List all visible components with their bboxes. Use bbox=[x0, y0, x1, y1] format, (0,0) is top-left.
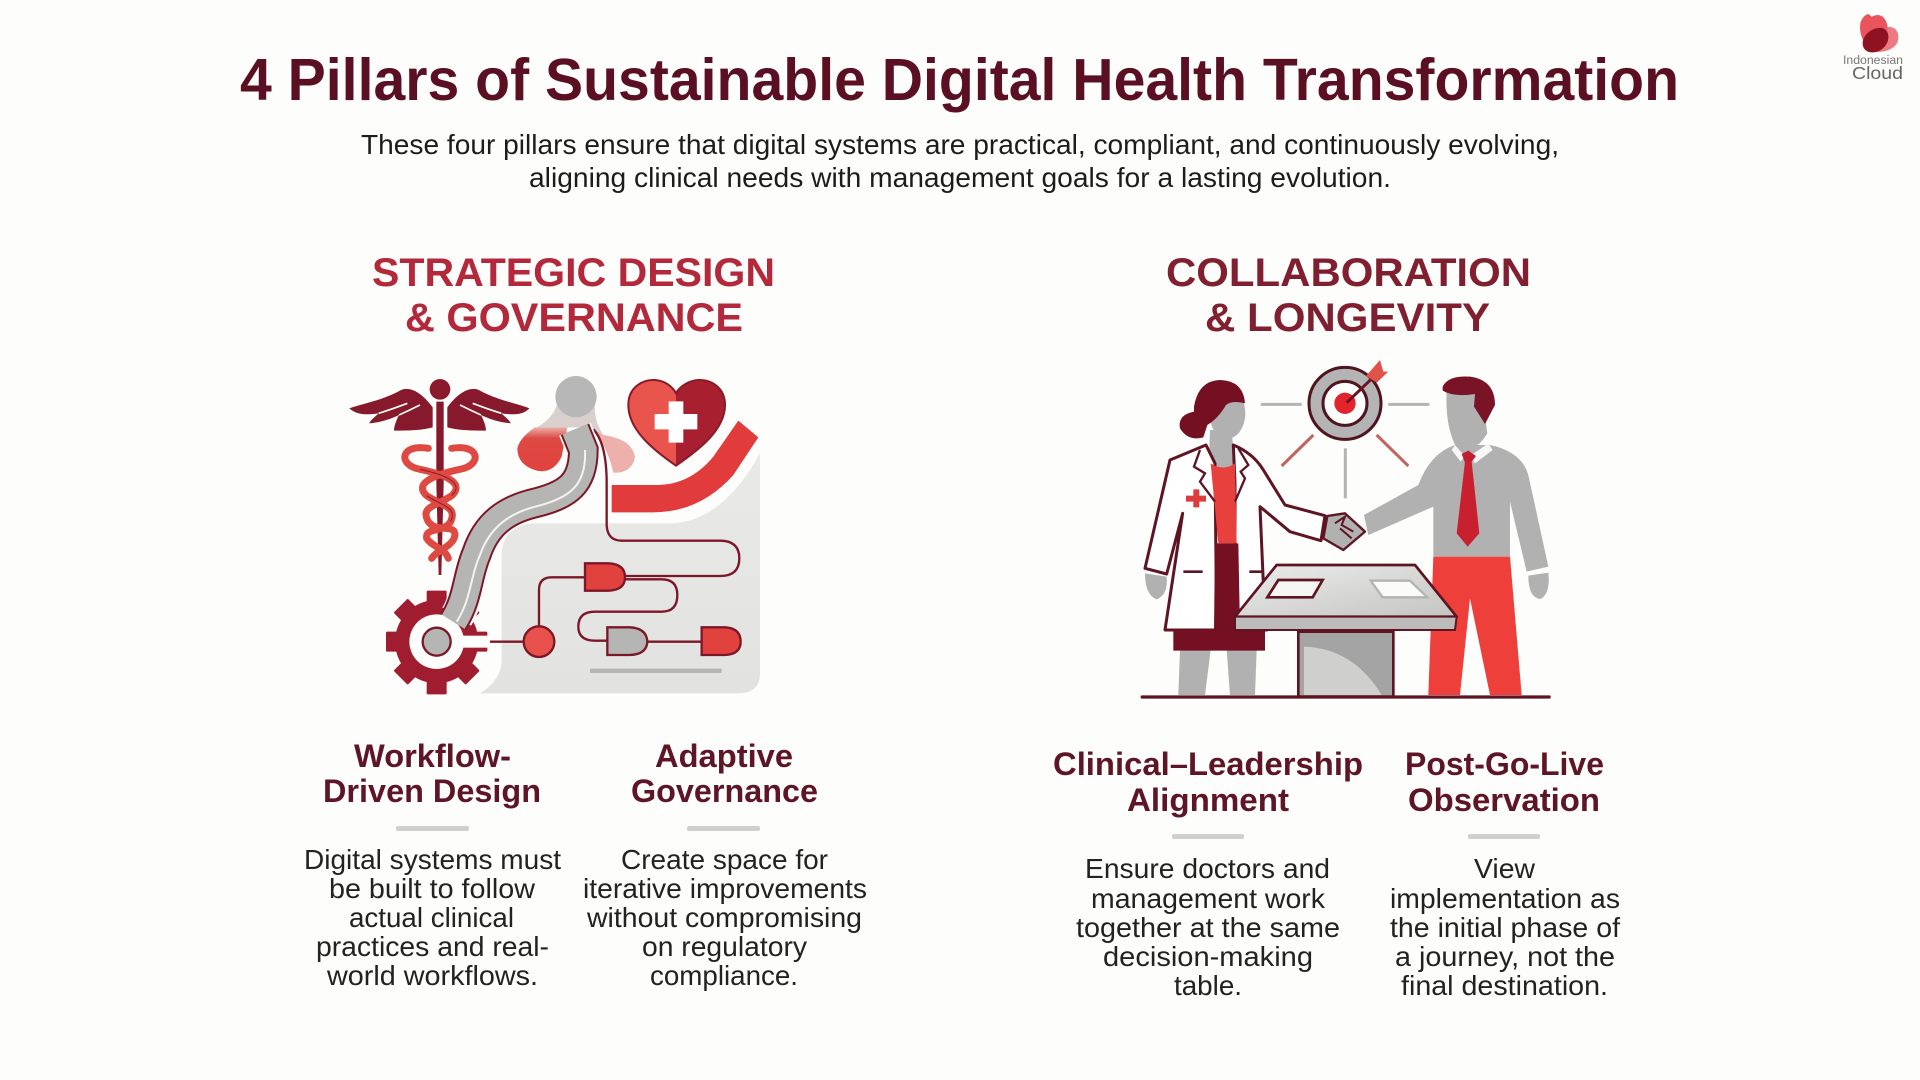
body text: Ensure doctors and bbox=[1085, 853, 1330, 884]
title: 4 Pillars of Sustainable Digital Health Transformation bbox=[240, 47, 1679, 113]
logo wordmark: Indonesian bbox=[1843, 55, 1903, 67]
body text: on regulatory bbox=[642, 931, 807, 962]
figure: doctor bbox=[1145, 380, 1325, 695]
heading: strategic design and governance: STRATEGIC DESIGN bbox=[372, 251, 775, 295]
body text bbox=[583, 844, 867, 991]
panel backdrop bbox=[480, 453, 760, 693]
body text: compliance. bbox=[650, 960, 798, 991]
heading: strategic design and governance: & GOVERNANCE bbox=[405, 296, 743, 340]
column: adaptive governance bbox=[583, 738, 867, 991]
body text: world workflows. bbox=[326, 960, 538, 991]
body text: final destination. bbox=[1401, 970, 1608, 1001]
subheading bbox=[1053, 746, 1363, 818]
body text bbox=[1076, 853, 1340, 1001]
subheading: Driven Design bbox=[323, 773, 541, 809]
illustration: doctor and manager handshake bbox=[1141, 360, 1551, 699]
subtitle: These four pillars ensure that digital systems are practical, compliant, and continuously evolving, bbox=[361, 129, 1559, 160]
subheading: Clinical–Leadership bbox=[1053, 746, 1363, 782]
icon: lamp shape bbox=[517, 376, 635, 473]
grey bar bbox=[590, 669, 722, 673]
body text: table. bbox=[1174, 970, 1242, 1001]
body text bbox=[304, 844, 561, 991]
body text bbox=[1390, 853, 1620, 1001]
icon: red swoosh bbox=[612, 421, 758, 512]
body text: without compromising bbox=[586, 902, 862, 933]
illustration: digital health workflow bbox=[349, 376, 760, 694]
subheading: Alignment bbox=[1127, 782, 1289, 818]
body text: a journey, not the bbox=[1395, 941, 1615, 972]
logo wordmark bbox=[1843, 55, 1903, 83]
body text: decision-making bbox=[1103, 941, 1313, 972]
subtitle: aligning clinical needs with management goals for a lasting evolution. bbox=[529, 162, 1391, 193]
icon: target with arrow bbox=[1309, 360, 1388, 439]
body text: practices and real- bbox=[316, 931, 549, 962]
subheading bbox=[1405, 746, 1604, 818]
icon: gear bbox=[386, 591, 490, 694]
subheading: Post-Go-Live bbox=[1405, 746, 1604, 782]
snakes bbox=[405, 448, 475, 558]
heading: strategic design and governance bbox=[372, 251, 775, 340]
body text: Create space for bbox=[621, 844, 828, 875]
figure: manager bbox=[1364, 376, 1549, 695]
subheading: Workflow- bbox=[354, 738, 511, 774]
subheading: Governance bbox=[631, 773, 818, 809]
body text: implementation as bbox=[1390, 883, 1620, 914]
icon: caduceus bbox=[349, 379, 529, 575]
panel: collaboration and longevity bbox=[1053, 251, 1620, 1001]
icon: heart with cross bbox=[628, 380, 725, 466]
heading: collaboration and longevity: & LONGEVITY bbox=[1205, 296, 1490, 340]
body text: Digital systems must bbox=[304, 844, 561, 875]
body text: actual clinical bbox=[349, 902, 514, 933]
icon: logo petals bbox=[1860, 14, 1898, 52]
subtitle bbox=[361, 129, 1559, 193]
ground line bbox=[1141, 695, 1551, 699]
body text: iterative improvements bbox=[583, 873, 867, 904]
subheading bbox=[631, 738, 818, 809]
icon: logic gates bbox=[524, 563, 741, 657]
logo: Indonesian Cloud bbox=[1843, 14, 1903, 83]
subheading: Adaptive bbox=[655, 738, 793, 774]
body text: View bbox=[1474, 853, 1536, 884]
icon: handshake bbox=[1323, 513, 1365, 550]
column: post-go-live observation bbox=[1390, 746, 1620, 1001]
logo wordmark: Cloud bbox=[1852, 63, 1903, 83]
column: clinical-leadership alignment bbox=[1053, 746, 1363, 1001]
subheading: Observation bbox=[1408, 782, 1600, 818]
icon: circuit wires bbox=[452, 429, 739, 642]
rays bbox=[1261, 404, 1429, 498]
body text: be built to follow bbox=[329, 873, 536, 904]
panel: strategic design and governance bbox=[304, 251, 867, 991]
column: workflow-driven design bbox=[304, 738, 561, 991]
body text: together at the same bbox=[1076, 912, 1340, 943]
heading: collaboration and longevity: COLLABORATION bbox=[1166, 251, 1531, 295]
subheading bbox=[323, 738, 541, 809]
body text: management work bbox=[1091, 883, 1326, 914]
heading: collaboration and longevity bbox=[1166, 251, 1531, 340]
icon: data pipe bbox=[453, 429, 585, 622]
icon: table bbox=[1235, 565, 1457, 697]
body text: the initial phase of bbox=[1390, 912, 1620, 943]
